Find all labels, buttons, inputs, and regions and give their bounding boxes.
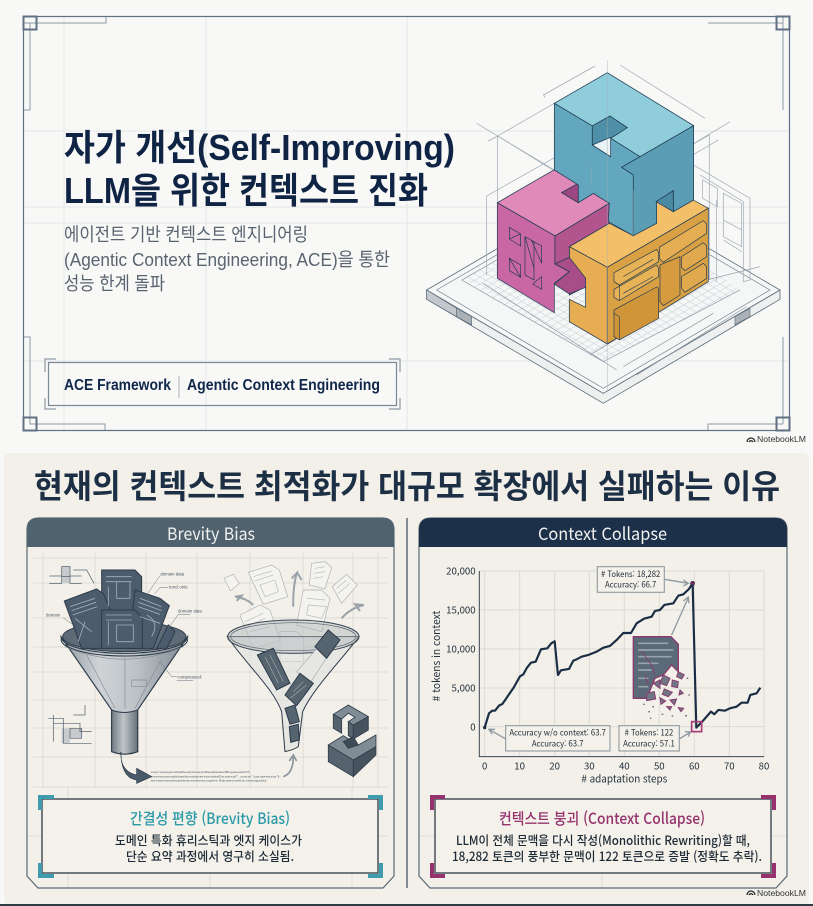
axis labels xyxy=(428,564,769,786)
data line xyxy=(485,583,760,728)
panel header xyxy=(27,518,394,547)
badge: ACE Framework xyxy=(45,359,400,409)
heading: 현재의 컨텍스트 최적화가 대규모 확장에서 실패하는 이유 xyxy=(34,460,780,508)
icon: schematic details xyxy=(48,567,94,743)
callout: peak: Accuracy: 66.7 xyxy=(605,579,657,591)
panel header: Brevity Bias xyxy=(167,520,255,545)
axis labels: 15,000 xyxy=(446,603,476,617)
callout: collapse: Accuracy: 57.1 xyxy=(623,738,675,750)
callout: peak xyxy=(597,567,664,592)
logo: NotebookLM: NotebookLM xyxy=(757,434,806,444)
axis labels: 0 xyxy=(482,758,487,772)
axis labels: 5,000 xyxy=(452,681,476,695)
annotation arrows xyxy=(489,579,690,739)
panel header: Context Collapse xyxy=(538,520,667,545)
callout: start: Accuracy w/o context: 63.7 xyxy=(509,727,606,739)
panel header xyxy=(419,518,787,547)
subtitle: 성능 한계 돌파 xyxy=(64,273,165,294)
block: orange xyxy=(569,200,708,344)
callout: Context Collapse xyxy=(432,797,774,876)
callout: start: Accuracy: 63.7 xyxy=(532,738,584,750)
title: 자가 개선(Self-Improving) xyxy=(64,127,455,168)
axis labels: 70 xyxy=(724,758,735,772)
callout: collapse xyxy=(619,726,679,751)
axis labels: # adaptation steps xyxy=(581,771,667,786)
title xyxy=(64,127,455,211)
figure labels: domain data xyxy=(160,572,185,577)
icon: shattered document xyxy=(633,637,690,718)
subtitle: (Agentic Context Engineering, ACE)을 통한 xyxy=(64,249,390,270)
block: blue xyxy=(554,73,694,236)
figure labels: tmeioresmasicitdsnersessercoupies Eduamesefns.resrt(gstis); xyxy=(151,779,268,783)
callout: peak: # Tokens: 18,282 xyxy=(601,568,661,580)
overlay guides xyxy=(592,60,633,390)
subtitle: 에이전트 기반 컨텍스트 엔지니어링 xyxy=(64,224,308,245)
callout: Brevity Bias: 도메인 특화 휴리스틱과 엣지 케이스가 xyxy=(115,830,302,849)
title: LLM을 위한 컨텍스트 진화 xyxy=(64,170,428,211)
illustration: isometric context blocks xyxy=(427,60,780,403)
figure labels: domain xyxy=(46,612,61,617)
subtitle xyxy=(64,224,390,294)
axis labels: 10,000 xyxy=(446,642,476,656)
callout: Brevity Bias: 간결성 편향 (Brevity Bias) xyxy=(130,807,290,829)
panel: top title slide xyxy=(0,0,813,450)
figure labels: sver:(assproofaihost)sreesstfsettsiasoffbspeestsh?; xyxy=(151,770,251,774)
badge: ACE Framework: Agentic Context Engineering xyxy=(187,377,380,394)
axis labels: 80 xyxy=(759,758,769,772)
figure labels: toncl.onts xyxy=(169,584,188,589)
wireframe guides xyxy=(477,65,750,282)
axis labels: 60 xyxy=(689,758,700,772)
blueprint frame xyxy=(24,16,790,430)
axis labels: # tokens in context xyxy=(428,611,443,701)
axis labels: 30 xyxy=(584,758,595,772)
base plate xyxy=(427,187,780,403)
axis labels: 50 xyxy=(654,758,665,772)
figure labels: essesosmadsbashostsaverscotsitsEsusesof", const "compressor"]; xyxy=(151,774,281,778)
right funnel with lost documents xyxy=(224,562,364,777)
left funnel with documents xyxy=(61,570,188,783)
icon: isometric block xyxy=(328,705,376,777)
axis labels: 10 xyxy=(514,758,525,772)
logo: NotebookLM footer: NotebookLM xyxy=(757,888,806,898)
block: pink xyxy=(497,169,609,313)
callout: Context Collapse: 18,282 토큰의 풍부한 문맥이 122 토큰으로 증발 (정확도 추락). xyxy=(452,846,762,865)
panel: Brevity Bias xyxy=(27,518,394,888)
callout: collapse: # Tokens: 122 xyxy=(625,727,674,739)
axis labels: 0 xyxy=(470,719,476,733)
callout: start xyxy=(506,726,610,751)
panel: Context Collapse xyxy=(419,518,787,888)
axis labels: 40 xyxy=(619,758,630,772)
figure labels: compressed: xyxy=(177,674,202,679)
axis labels: 20,000 xyxy=(446,564,476,578)
callout: Brevity Bias xyxy=(40,797,381,876)
callout: Context Collapse: 컨텍스트 붕괴 (Context Collapse) xyxy=(499,807,705,829)
line chart: tokens in context xyxy=(428,564,769,786)
axis labels: 20 xyxy=(549,758,560,772)
figure labels: domain data xyxy=(178,608,202,613)
illustration: funnels xyxy=(46,562,376,783)
badge: ACE Framework: ACE Framework xyxy=(64,377,171,394)
callout: Context Collapse: LLM이 전체 문맥을 다시 작성(Monolithic Rewriting)할 때, xyxy=(456,830,750,849)
figure labels xyxy=(46,572,281,783)
divider xyxy=(406,518,408,888)
callout: Brevity Bias: 단순 요약 과정에서 영구히 소실됨. xyxy=(126,846,294,865)
